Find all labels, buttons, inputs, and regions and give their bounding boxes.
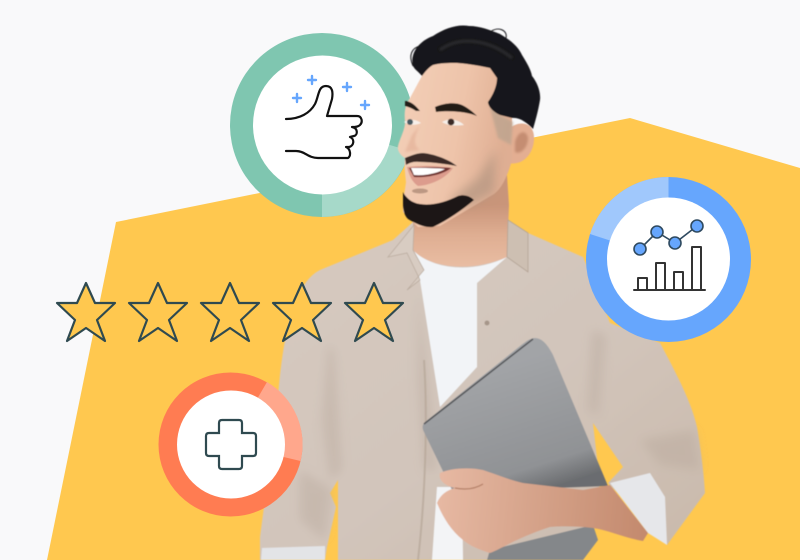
laptop rim	[424, 339, 533, 424]
star 4	[273, 283, 331, 341]
placket shadow line	[418, 360, 426, 560]
mouth lips	[407, 166, 453, 186]
yellow backdrop shape	[47, 118, 800, 560]
collar left	[388, 225, 424, 290]
neck	[413, 160, 509, 267]
moustache	[405, 153, 457, 166]
left cuff	[261, 546, 325, 560]
ear inner shadow	[515, 132, 528, 153]
panel: orange health ring	[158, 372, 303, 516]
collar right	[507, 220, 528, 272]
teeth	[411, 168, 445, 175]
t-shirt lower	[432, 487, 463, 560]
right cuff	[610, 473, 667, 545]
eyebrows	[405, 101, 477, 116]
hair	[412, 25, 540, 129]
hair curls	[411, 29, 506, 66]
panel: blue chart ring	[586, 177, 751, 342]
white t-shirt	[413, 250, 507, 407]
star 3	[201, 283, 259, 341]
cheek stubble	[448, 150, 496, 206]
panel: green thumbs-up ring	[230, 33, 414, 217]
eyes	[404, 119, 464, 126]
forearm and hand	[437, 468, 648, 553]
beard	[403, 192, 474, 227]
soul patch	[412, 188, 428, 194]
shirt button	[484, 320, 490, 326]
icon: medical cross	[206, 420, 256, 469]
ear	[508, 124, 534, 163]
face	[398, 50, 512, 227]
icon: thumbs up	[286, 86, 362, 158]
star 5	[345, 283, 403, 341]
five star rating	[57, 283, 403, 341]
person	[260, 25, 705, 560]
laptop lower	[487, 525, 598, 560]
icon: blue sparkles	[293, 76, 369, 109]
star 1	[57, 283, 115, 341]
star 2	[129, 283, 187, 341]
shirt silhouette	[260, 220, 705, 560]
finger lines	[455, 484, 483, 489]
hair highlight	[440, 41, 512, 58]
icon: line chart and bars	[634, 220, 705, 290]
nose shadow	[405, 125, 420, 152]
laptop upper	[423, 338, 608, 492]
mouth inner	[409, 167, 451, 177]
shirt shadow folds	[300, 290, 700, 540]
temple fade	[488, 100, 513, 145]
